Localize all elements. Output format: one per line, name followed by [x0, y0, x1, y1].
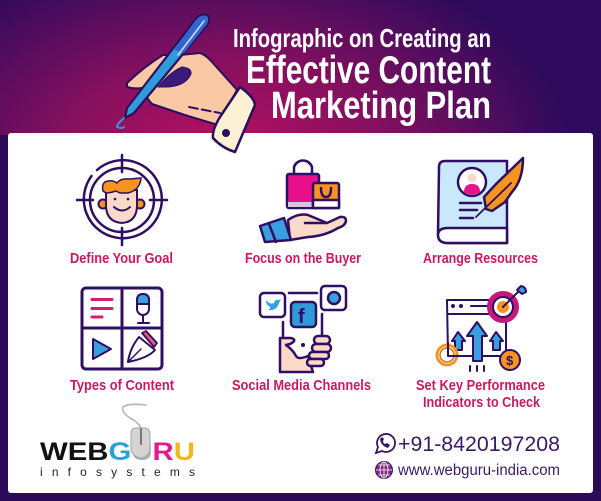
label: arrange resources: Arrange Resources	[423, 250, 538, 267]
logo: webguru infosystems	[40, 404, 195, 479]
icon: mouse	[123, 404, 150, 458]
icon: social media hand: f	[298, 306, 305, 328]
label: set key performance indicators: Indicators to Check	[423, 394, 541, 411]
icon: book and quill	[438, 158, 523, 243]
title	[233, 23, 491, 127]
face	[98, 178, 144, 223]
hand	[127, 53, 237, 125]
title: Effective Content	[246, 49, 491, 92]
title: Infographic on Creating an	[233, 23, 491, 53]
icon: shopping bags on hand	[260, 161, 346, 242]
icon: KPI dashboard: $	[506, 353, 514, 368]
icon: KPI dashboard	[437, 286, 526, 371]
white content panel	[8, 133, 593, 493]
header gradient band	[0, 0, 601, 135]
label: set key performance indicators	[416, 377, 545, 411]
icon: define your goal target	[77, 155, 167, 245]
label: focus on the buyer: Focus on the Buyer	[245, 250, 361, 267]
icon: hand holding pen	[117, 15, 255, 152]
icon: social media hand	[260, 286, 346, 372]
logo: webguru infosystems: WEB GURU	[40, 438, 195, 466]
label: set key performance indicators: Set Key Performance	[416, 377, 545, 394]
pen	[117, 15, 209, 128]
palm shadow	[158, 67, 191, 87]
icon: types of content grid	[82, 288, 162, 369]
label: social media channels: Social Media Channels	[232, 377, 371, 394]
cuff	[213, 87, 255, 152]
phone number: +91-8420197208	[398, 433, 560, 456]
icon: whatsapp phone	[376, 434, 395, 453]
title: Marketing Plan	[271, 85, 491, 127]
label: types of content: Types of Content	[70, 377, 174, 394]
icon: globe	[376, 462, 392, 478]
label: define your goal: Define Your Goal	[70, 250, 173, 267]
website: www.webguru-india.com	[397, 462, 560, 479]
logo: webguru infosystems: infosystems	[40, 465, 195, 479]
